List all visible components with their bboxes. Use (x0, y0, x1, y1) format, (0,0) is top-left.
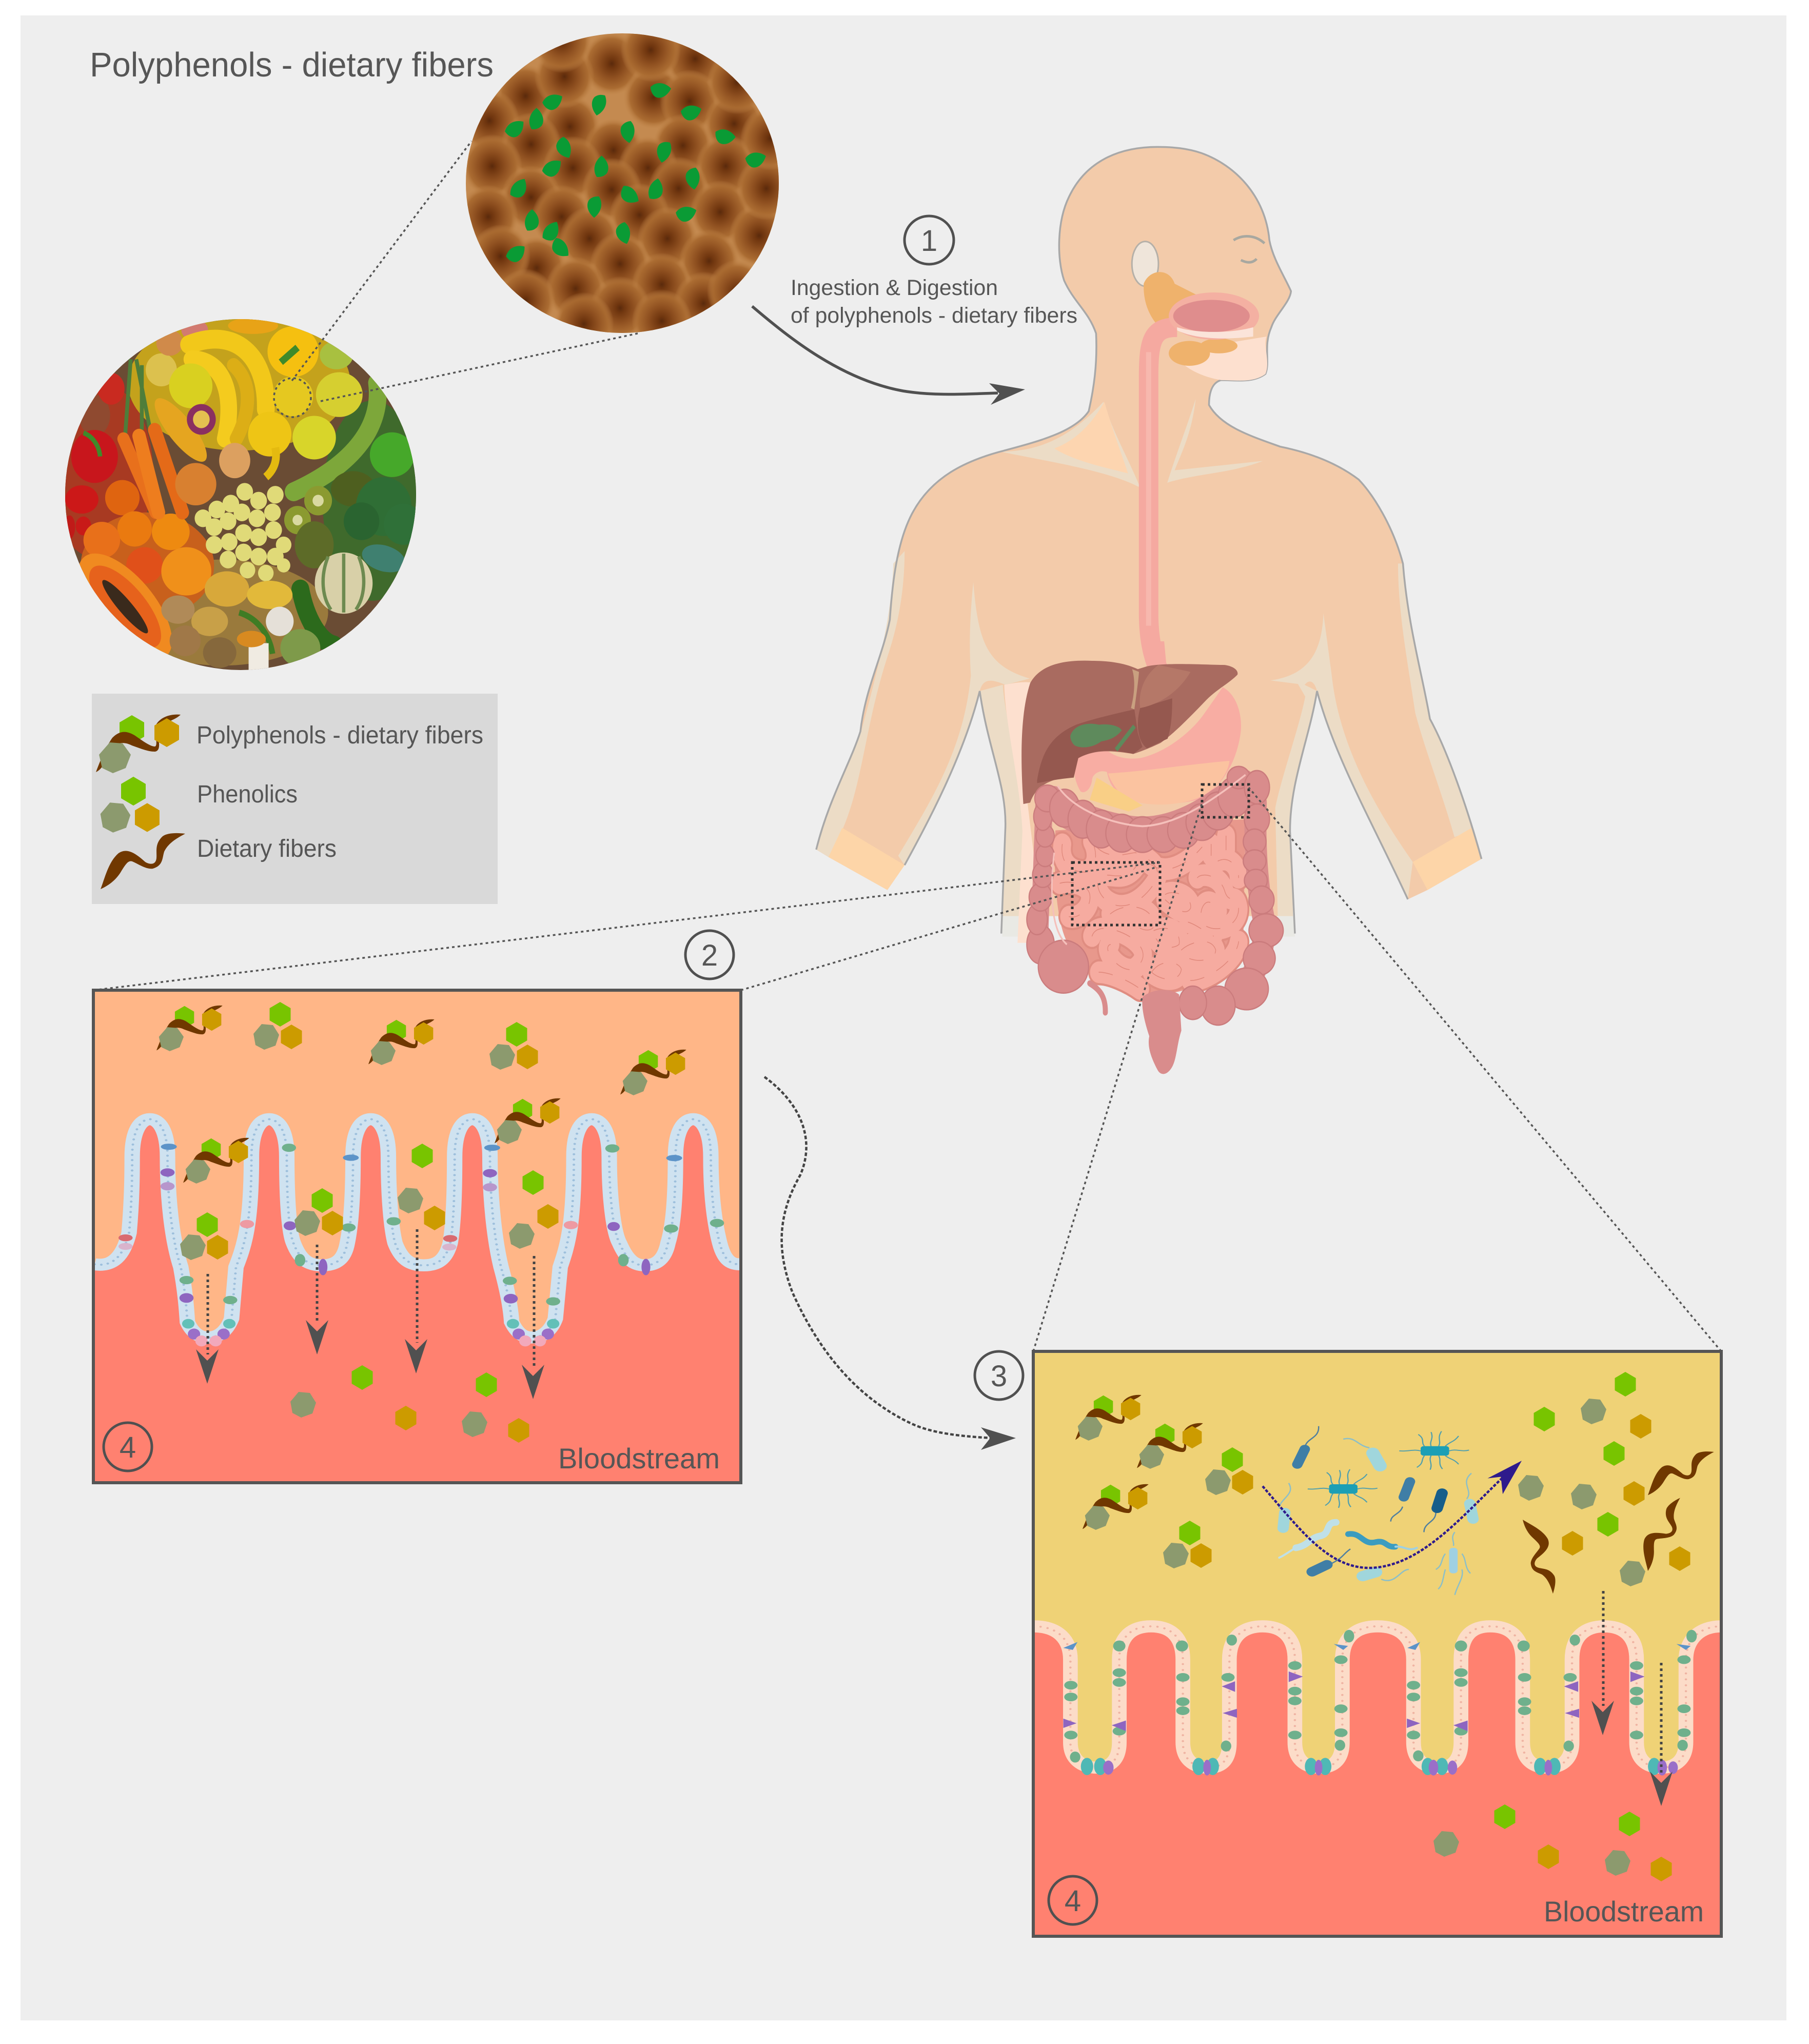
polyphenol fiber complexes: colon (1075, 1395, 1203, 1530)
liver (1021, 661, 1237, 804)
vegetable: carrots and corn (124, 359, 217, 513)
torso lower fade (1002, 916, 1295, 937)
absorption arrows: small intestine (196, 1229, 544, 1399)
fruit: red side (64, 373, 211, 596)
crypt base cells (1081, 1758, 1678, 1776)
human body (816, 147, 1482, 943)
bloodstream label: Bloodstream (558, 1442, 720, 1475)
panel border (93, 990, 741, 1483)
step number 2: 2 (701, 939, 718, 972)
regional colour underlays (47, 315, 423, 665)
ear (1132, 242, 1158, 286)
legend icon: polyphenol fiber complex (96, 715, 181, 773)
vegetable: potatoes and bottom row (161, 572, 293, 673)
legend label: dietary fibers: Dietary fibers (197, 835, 337, 862)
appendix (1090, 984, 1105, 1013)
bacterium: pale vertical (1449, 1548, 1458, 1574)
vegetable: greens (239, 433, 423, 667)
legend label: polyphenols dietary fibers: Polyphenols - dietary fibers (196, 722, 483, 749)
bacterium: flagella pale (1279, 1439, 1471, 1595)
panel: colon (1033, 1351, 1721, 1936)
epithelium band (1033, 1626, 1721, 1767)
icon: fruit and vegetable circle (47, 315, 423, 676)
colon under-strokes (1039, 786, 1264, 989)
panel: small intestine (93, 990, 741, 1484)
body shading bands (816, 399, 1472, 916)
fruit: top bananas and yellow (146, 318, 378, 492)
ingestion label (791, 276, 1077, 328)
crypt base cells: right (507, 1319, 559, 1346)
polyphenol fiber complexes: small intestine (156, 1006, 686, 1184)
dotted zoom lines: intestine to panels (93, 788, 1721, 1351)
lower face (1172, 337, 1267, 381)
fruit: papaya (80, 554, 171, 655)
pancreas (1090, 778, 1143, 812)
step number 4: 4 (120, 1431, 136, 1464)
lumen background (93, 990, 741, 1483)
legend icon: dietary fibers (101, 833, 185, 889)
absorption arrows: colon (1591, 1591, 1673, 1806)
bacterium: rod bodies (1290, 1444, 1449, 1578)
epithelium band (94, 1119, 740, 1338)
free dietary fibers (1510, 1451, 1714, 1594)
step number 1: 1 (921, 224, 937, 258)
small intestine (1055, 819, 1246, 996)
crypt base cells: left (182, 1319, 235, 1346)
icon: food cell matrix magnified circle (466, 33, 779, 333)
step number 4 (104, 1423, 152, 1471)
body outline (816, 147, 1482, 934)
stomach (1074, 687, 1241, 804)
colon inner light line (1052, 775, 1246, 945)
purple goblet cells (1063, 1672, 1645, 1731)
arrow: food to mouth (752, 306, 1025, 405)
wrist bands (829, 828, 1482, 890)
esophagus end (1143, 641, 1167, 666)
salivary glands (1144, 272, 1237, 366)
title: Polyphenols - dietary fibers (90, 46, 494, 84)
blood side tissue (1033, 1626, 1721, 1936)
step number 1 (904, 216, 954, 264)
dotted zoom lines: food to cell matrix (274, 141, 640, 417)
esophagus (1149, 327, 1177, 679)
colon (1027, 767, 1283, 1025)
phenolic hexagons: colon (1163, 1372, 1690, 1881)
ingestion label: Ingestion & Digestion (791, 276, 998, 300)
rectum (1142, 990, 1182, 1074)
dotted magnification box: colon (1202, 784, 1249, 817)
body silhouette (816, 147, 1482, 916)
epithelium nuclei (1033, 1626, 1721, 1767)
bacterium: spirals (1279, 1522, 1417, 1558)
bacterium: spiky (1308, 1431, 1469, 1508)
dotted magnification box: small intestine (1072, 862, 1160, 925)
rib patch (1004, 682, 1045, 943)
green epithelial cells (1064, 1630, 1697, 1762)
legend panel (92, 694, 498, 904)
specialised epithelial cells (119, 1144, 724, 1306)
bacteria cluster (1263, 1426, 1522, 1595)
step number 3 (975, 1351, 1023, 1400)
eyebrow and eye (1233, 236, 1265, 262)
step number 4 (1049, 1876, 1097, 1924)
neck light triangle (1054, 402, 1128, 474)
epithelium nuclei (94, 1119, 740, 1338)
bacterium: flagella (1305, 1426, 1436, 1564)
step number 3: 3 (991, 1360, 1007, 1393)
ingestion label: of polyphenols - dietary fibers (791, 303, 1077, 328)
dashed arrow: small intestine to colon (764, 1077, 1016, 1450)
phenolic hexagons: small intestine (180, 1002, 558, 1443)
bacterium: pale curved (1277, 1446, 1480, 1583)
step number 4: 4 (1065, 1884, 1081, 1918)
blood side tissue (93, 1119, 741, 1484)
gallbladder (1070, 724, 1134, 750)
legend label: phenolics: Phenolics (197, 781, 298, 808)
lumen background (1033, 1351, 1721, 1936)
blue epithelial cells (1063, 1642, 1690, 1650)
panel border (1033, 1351, 1721, 1936)
mouth cavity (1169, 292, 1259, 340)
fruit: grapes (194, 483, 291, 581)
bloodstream label: Bloodstream (1544, 1895, 1704, 1928)
legend icon: phenolics (101, 777, 160, 833)
digestive organs (1021, 641, 1283, 1074)
metabolism arrow (1263, 1461, 1522, 1568)
step number 2 (685, 931, 734, 979)
